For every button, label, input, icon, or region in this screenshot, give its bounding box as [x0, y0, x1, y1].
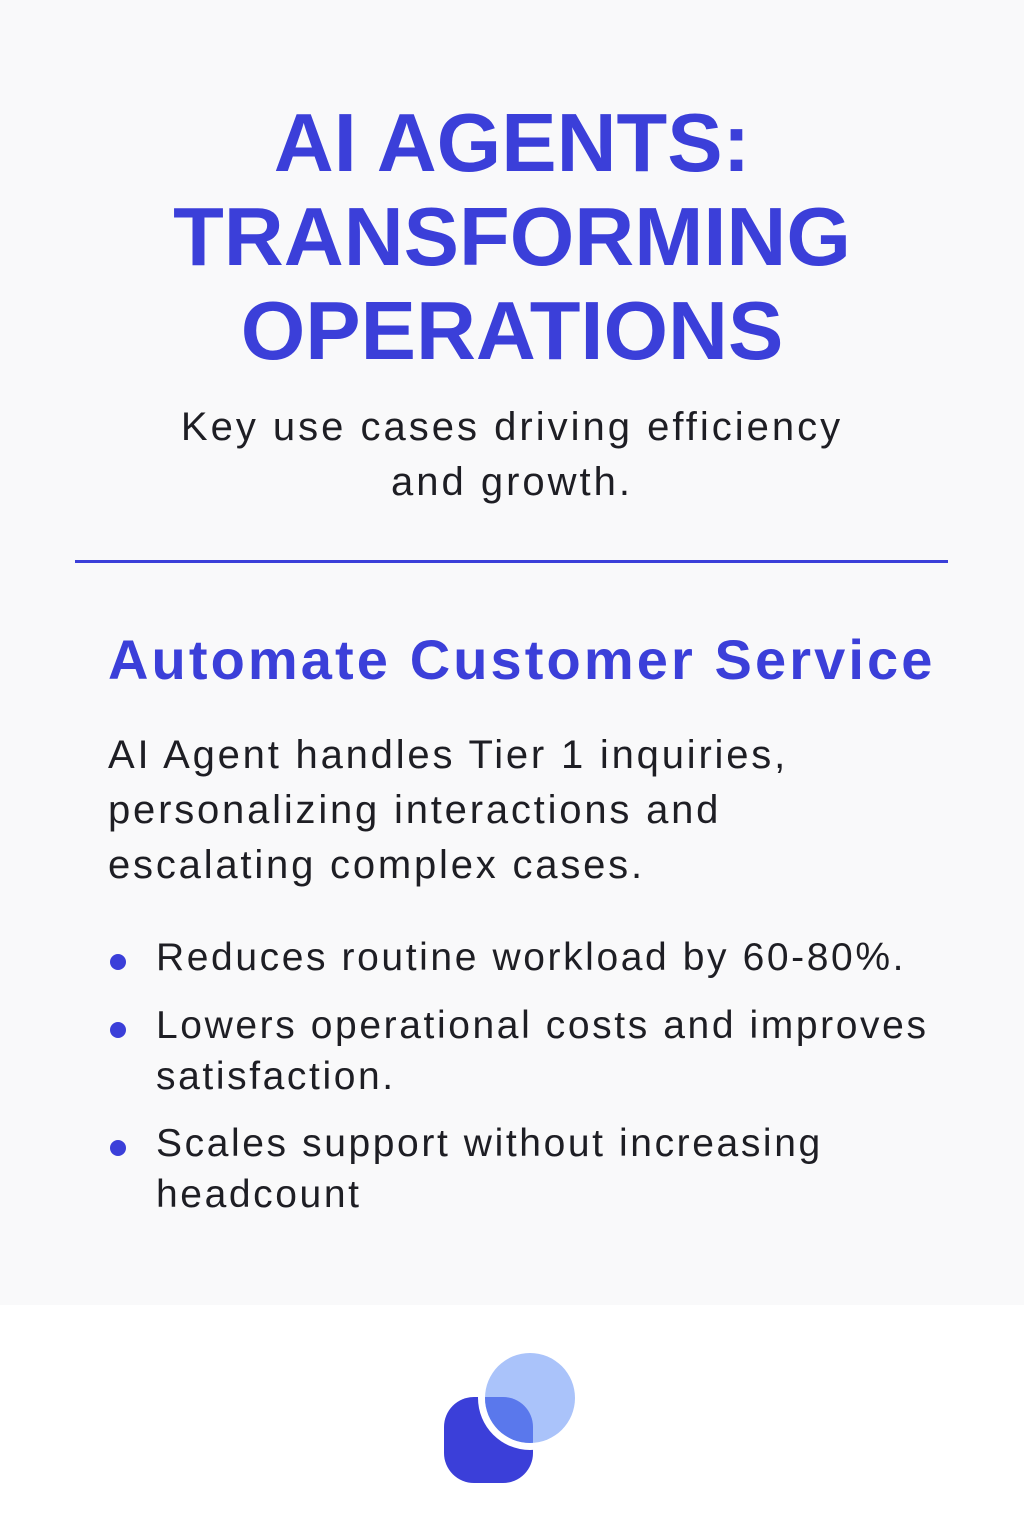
bullet 3: headcount — [156, 1173, 362, 1216]
bullet 2: Lowers operational costs and improves — [156, 1004, 929, 1047]
subtitle: Key use cases driving efficiency — [181, 405, 843, 449]
description text: AI Agent handles Tier 1 inquiries, — [108, 733, 788, 777]
description text: escalating complex cases. — [108, 843, 645, 887]
description text — [108, 733, 788, 887]
title: TRANSFORMING — [173, 190, 851, 283]
title: AI AGENTS: — [274, 96, 750, 189]
bullet 1: Reduces routine workload by 60-80%. — [156, 936, 906, 979]
title — [173, 96, 851, 377]
bullet 3 — [110, 1122, 823, 1216]
icon: logo — [444, 1353, 575, 1483]
title: OPERATIONS — [241, 284, 783, 377]
bullet 2 — [110, 1004, 929, 1098]
section heading: Automate Customer Service — [108, 628, 936, 691]
description text: personalizing interactions and — [108, 788, 721, 832]
subtitle: and growth. — [391, 460, 633, 504]
subtitle — [181, 405, 843, 504]
bullet 3: Scales support without increasing — [156, 1122, 823, 1165]
bullet 2: satisfaction. — [156, 1055, 396, 1098]
